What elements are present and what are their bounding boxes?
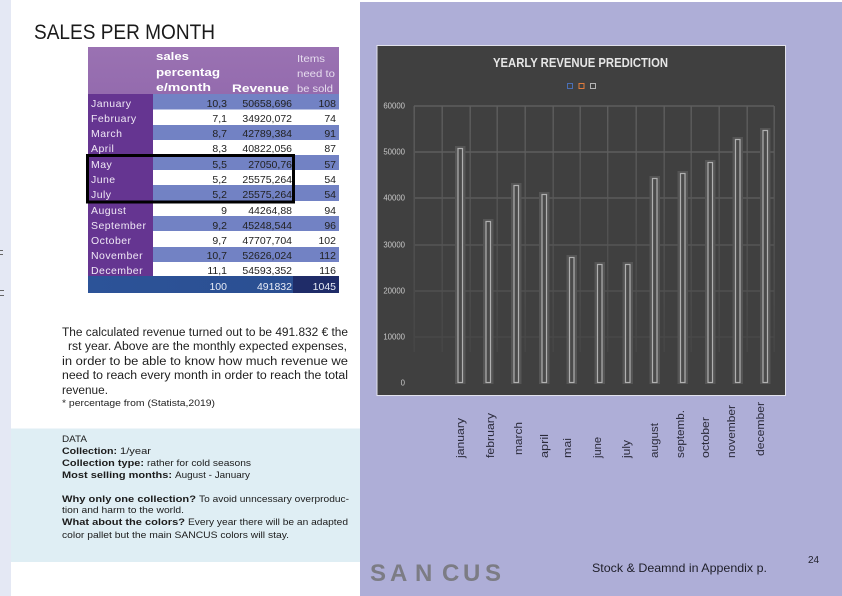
y axis labels: 30000 bbox=[383, 240, 406, 250]
table values: 5,2 bbox=[212, 174, 227, 186]
y axis labels: 40000 bbox=[383, 194, 406, 202]
y axis labels: 10000 bbox=[383, 332, 406, 342]
x axis month labels: march bbox=[513, 422, 525, 455]
data text: color pallet but the main SANCUS colors will stay. bbox=[62, 530, 289, 541]
table values: 10,3 bbox=[207, 98, 227, 110]
table values: 112 bbox=[319, 250, 336, 262]
chart: yearly revenue prediction bbox=[377, 46, 786, 396]
y axis labels: 20000 bbox=[383, 286, 406, 296]
table values: 74 bbox=[324, 113, 336, 125]
data text: To avoid unncessary overproduc- bbox=[199, 494, 349, 505]
table values: 25575,264 bbox=[242, 174, 292, 186]
bars bbox=[458, 130, 768, 382]
table row bands bbox=[88, 94, 339, 276]
table: sales per month bbox=[88, 47, 339, 293]
text block: revenue explanation: need to reach every month in order to reach the total bbox=[62, 370, 348, 382]
month labels: January bbox=[91, 98, 132, 110]
table header: e/month bbox=[156, 82, 211, 94]
month labels: February bbox=[91, 113, 137, 125]
month labels: July bbox=[91, 189, 112, 201]
x axis month labels: june bbox=[592, 437, 604, 459]
table values: 9,7 bbox=[212, 235, 227, 247]
table values: 10,7 bbox=[207, 250, 227, 262]
table header: percentag bbox=[156, 67, 220, 79]
data text: Collection type: bbox=[62, 458, 144, 469]
data text: Every year there will be an adapted bbox=[188, 517, 348, 528]
page number: 24 bbox=[808, 555, 820, 566]
table values: 54 bbox=[324, 189, 336, 201]
table values: 8,7 bbox=[212, 128, 227, 140]
table values: 54593,352 bbox=[242, 265, 292, 277]
title: SALES PER MONTH bbox=[34, 21, 215, 44]
table values: 8,3 bbox=[212, 143, 227, 155]
table totals row: 491832 bbox=[257, 281, 292, 293]
table values: 94 bbox=[324, 205, 336, 217]
table values: 5,2 bbox=[212, 189, 227, 201]
data text: 1/year bbox=[120, 446, 151, 457]
month labels: April bbox=[91, 143, 114, 155]
month labels: May bbox=[91, 159, 112, 171]
month labels: March bbox=[91, 128, 122, 140]
data text: tion and harm to the world. bbox=[62, 505, 184, 516]
data text: What about the colors? bbox=[62, 517, 185, 528]
table values: 47707,704 bbox=[242, 235, 292, 247]
footnote: Stock & Deamnd in Appendix p. bbox=[592, 561, 767, 575]
chart grid bbox=[414, 106, 775, 352]
table totals row: 100 bbox=[209, 281, 227, 293]
table totals row bbox=[88, 276, 339, 293]
x axis month labels: february bbox=[485, 412, 497, 458]
table values: 42789,384 bbox=[242, 128, 292, 140]
table values: 96 bbox=[324, 220, 336, 232]
data text: August - January bbox=[175, 470, 250, 481]
chart legend bbox=[568, 84, 596, 88]
panel: data bbox=[11, 428, 360, 562]
table values: 25575,264 bbox=[242, 189, 292, 201]
table values bbox=[207, 98, 336, 277]
text block: revenue explanation: in order to be able to know how much revenue we bbox=[62, 356, 348, 368]
y axis labels: 0 bbox=[401, 378, 406, 388]
x axis month labels: october bbox=[700, 417, 712, 458]
data text: DATA bbox=[62, 434, 88, 445]
data text bbox=[62, 434, 349, 541]
x axis month labels: november bbox=[726, 405, 738, 458]
x axis month labels: april bbox=[539, 434, 551, 458]
text block: revenue explanation: The calculated revenue turned out to be 491.832 € the bbox=[62, 327, 348, 339]
table values: 91 bbox=[324, 128, 336, 140]
month labels: November bbox=[91, 250, 143, 262]
brand logo: SANCUS bbox=[370, 560, 501, 587]
data text: Collection: bbox=[62, 446, 117, 457]
table values: 44264,88 bbox=[248, 205, 292, 217]
data text: Why only one collection? bbox=[62, 494, 196, 505]
table values: 34920,072 bbox=[242, 113, 292, 125]
text block: revenue explanation: * percentage from (Statista,2019) bbox=[62, 398, 215, 409]
table values: 87 bbox=[324, 143, 336, 155]
month labels: June bbox=[91, 174, 116, 186]
table values: 52626,024 bbox=[242, 250, 292, 262]
table values: 9,2 bbox=[212, 220, 227, 232]
table values: 27050,76 bbox=[248, 159, 292, 171]
month labels: August bbox=[91, 205, 126, 217]
y axis labels: 50000 bbox=[383, 148, 406, 156]
x axis month labels bbox=[455, 402, 767, 459]
table values: 57 bbox=[324, 159, 336, 171]
table header: Items bbox=[297, 53, 325, 65]
table values: 11,1 bbox=[207, 265, 227, 277]
table header: sales bbox=[156, 51, 189, 63]
x axis month labels: january bbox=[455, 417, 467, 459]
table values: 116 bbox=[319, 265, 336, 277]
table values: 45248,544 bbox=[242, 220, 292, 232]
text block: revenue explanation bbox=[62, 327, 348, 409]
highlight box: May to July bbox=[88, 156, 294, 202]
x axis month labels: july bbox=[621, 439, 633, 459]
table values: 7,1 bbox=[212, 113, 227, 125]
month labels: September bbox=[91, 220, 146, 232]
x axis month labels: august bbox=[649, 423, 661, 458]
table values: 40822,056 bbox=[242, 143, 292, 155]
left margin strip bbox=[0, 0, 11, 596]
table values: 108 bbox=[318, 98, 336, 110]
month labels: December bbox=[91, 265, 143, 277]
table header: Revenue bbox=[232, 83, 289, 95]
table values: 5,5 bbox=[212, 159, 227, 171]
table values: 9 bbox=[221, 205, 227, 217]
y axis labels: 60000 bbox=[383, 102, 406, 110]
table header: need to bbox=[297, 68, 335, 80]
table header bbox=[88, 47, 339, 95]
table values: 102 bbox=[318, 235, 336, 247]
y axis labels bbox=[383, 102, 406, 388]
table totals row: 1045 bbox=[313, 281, 336, 293]
x axis month labels: septemb. bbox=[675, 410, 687, 458]
table values: 54 bbox=[324, 174, 336, 186]
month labels bbox=[91, 98, 146, 277]
text block: revenue explanation: rst year. Above are the monthly expected expenses, bbox=[68, 341, 347, 353]
data text: Most selling months: bbox=[62, 470, 172, 481]
text block: revenue explanation: revenue. bbox=[62, 385, 108, 397]
x axis month labels: mai bbox=[562, 438, 574, 458]
table values: 50658,696 bbox=[242, 98, 292, 110]
x axis month labels: december bbox=[755, 402, 767, 456]
right lavender panel bbox=[360, 2, 842, 596]
month labels: October bbox=[91, 235, 132, 247]
bar glow bbox=[455, 128, 770, 384]
chart title: YEARLY REVENUE PREDICTION bbox=[493, 56, 668, 70]
table header: be sold bbox=[297, 83, 333, 95]
data text: rather for cold seasons bbox=[147, 458, 251, 469]
